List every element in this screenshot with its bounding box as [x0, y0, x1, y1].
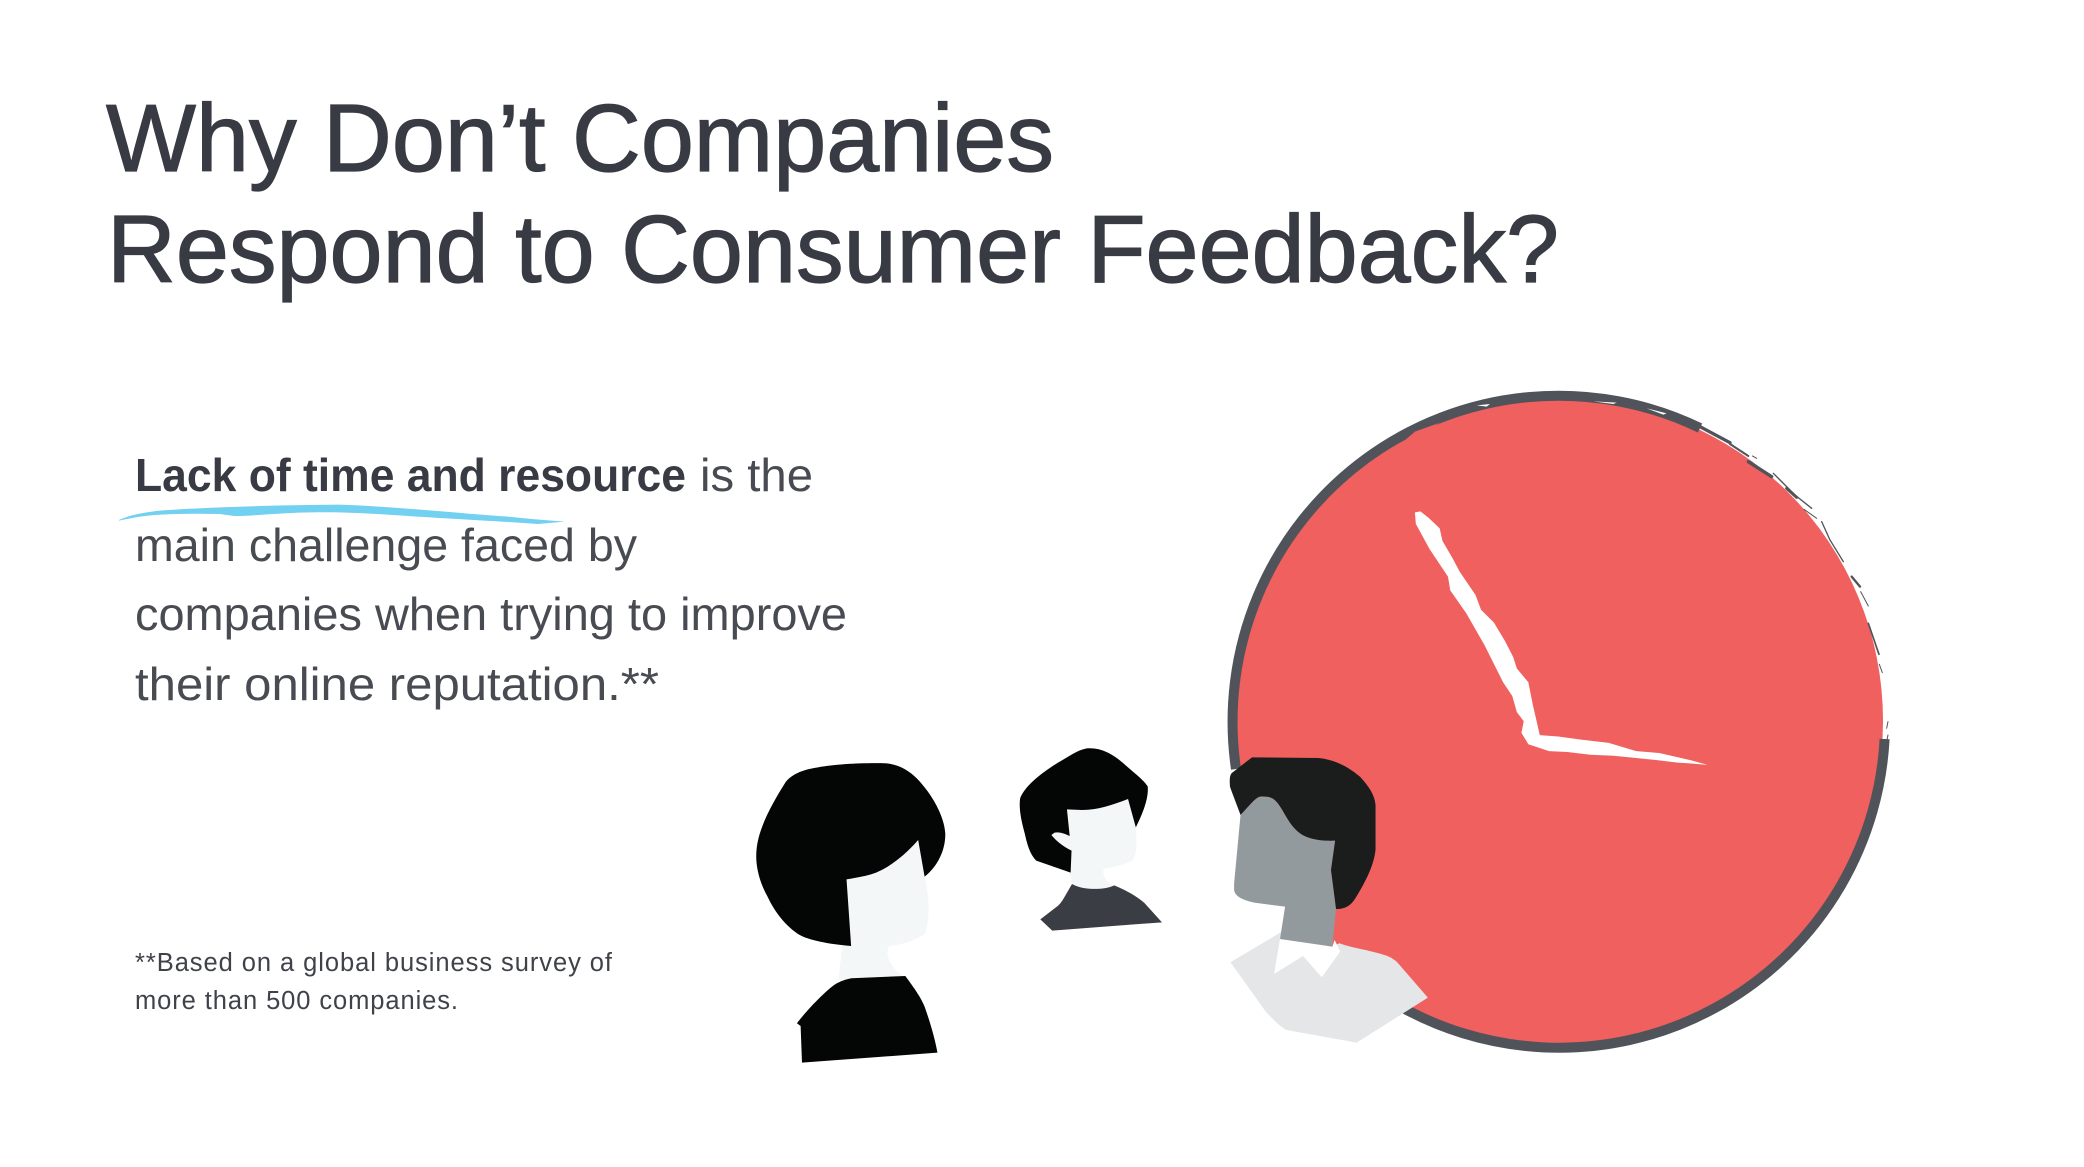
text block: main statement: main challenge faced by	[135, 519, 637, 571]
text block: main statement: Lack of time and resource	[135, 449, 686, 501]
right person face and neck	[1234, 796, 1336, 947]
text block: main statement: is the	[700, 449, 813, 501]
left person shirt	[797, 976, 937, 1063]
right person shirt	[1230, 932, 1428, 1043]
text block: main statement	[135, 449, 847, 710]
left person face and neck	[839, 840, 929, 980]
clock ring	[1233, 396, 1888, 1048]
blue brush underline	[119, 505, 565, 524]
title: Why Don’t Companies	[106, 85, 1054, 192]
title	[106, 85, 1559, 303]
person: left	[756, 763, 945, 1063]
clock face	[1236, 398, 1883, 1043]
footnote	[135, 949, 613, 1015]
left person hair	[756, 763, 945, 946]
middle person shirt	[1040, 884, 1162, 931]
clock hands	[1415, 511, 1707, 765]
person: right	[1230, 757, 1428, 1043]
middle person face and neck	[1051, 799, 1137, 890]
middle person hair	[1020, 748, 1148, 873]
footnote: **Based on a global business survey of	[135, 949, 613, 977]
text block: main statement: their online reputation.**	[135, 658, 659, 710]
footnote: more than 500 companies.	[135, 987, 458, 1015]
right person collar	[1274, 939, 1340, 977]
broken ring strokes, upper right	[1680, 420, 1888, 742]
ring scratches along the top	[1403, 401, 1667, 442]
title: Respond to Consumer Feedback?	[107, 196, 1559, 303]
text block: main statement: companies when trying to improve	[135, 588, 847, 640]
person: middle	[1020, 748, 1162, 931]
right person hair	[1230, 757, 1376, 909]
clock illustration	[1233, 396, 1888, 1048]
